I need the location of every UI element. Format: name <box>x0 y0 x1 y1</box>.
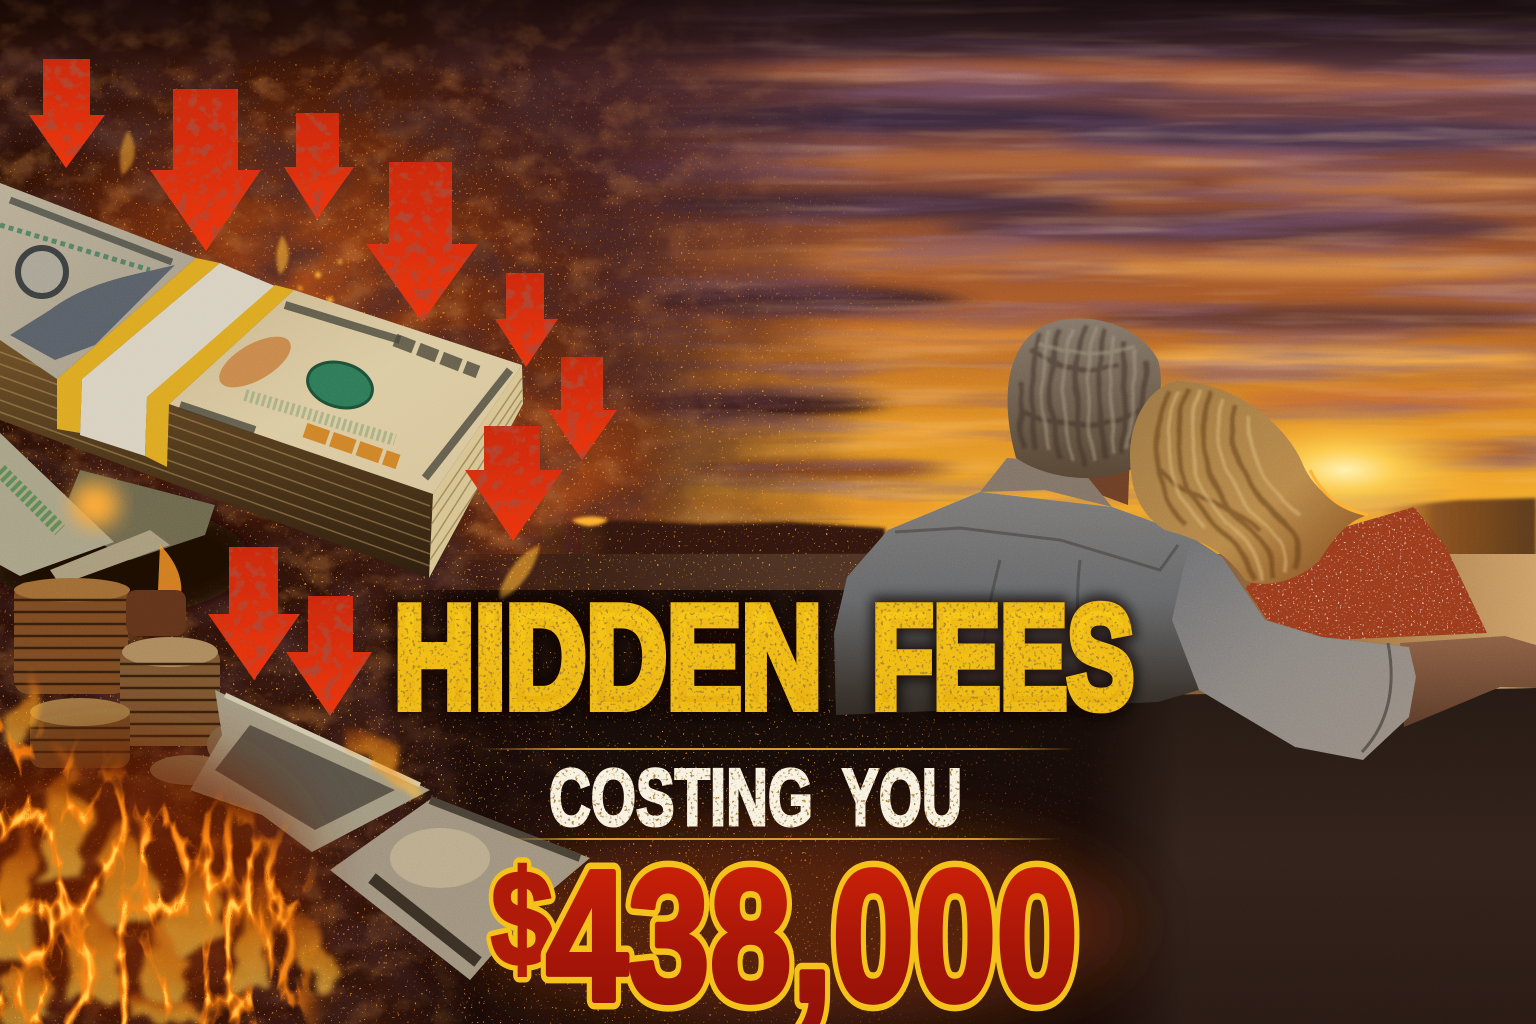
loose burning bills <box>0 433 250 615</box>
man shirt <box>834 492 1416 760</box>
subtitle: COSTING YOU: COSTING <box>549 753 813 843</box>
orange 100 numerals <box>305 430 398 462</box>
arrow 7 <box>465 426 563 541</box>
arrow 8 <box>208 547 300 680</box>
woman dress <box>1245 507 1487 640</box>
title: HIDDEN FEES <box>394 576 1134 738</box>
title letters: FEES <box>872 576 1134 738</box>
dollar sign: $ <box>491 843 553 994</box>
divider line upper <box>480 748 1075 750</box>
bill face right <box>169 290 522 494</box>
title shadow: FEES <box>872 576 1134 738</box>
arrow 9 <box>286 596 372 716</box>
downward red arrows <box>29 59 617 716</box>
sleeve cuff <box>1362 643 1391 752</box>
sun glow <box>1175 400 1515 540</box>
serial number <box>0 225 150 270</box>
water <box>440 554 1536 714</box>
forearm <box>1400 636 1536 727</box>
yellow flame filaments <box>0 780 290 1024</box>
amount: $438,000 <box>491 833 1078 1024</box>
stone wall <box>560 688 1536 1024</box>
arrow 6 <box>548 357 617 460</box>
border print <box>180 305 510 478</box>
portrait glow <box>211 326 299 398</box>
arrow 1 <box>29 59 105 168</box>
woman hair <box>1130 381 1368 584</box>
cash stack with band <box>0 183 523 578</box>
border print left <box>10 200 172 262</box>
100 numeral top <box>395 340 478 372</box>
flames <box>0 660 425 1024</box>
scattered bills on the ground <box>190 690 590 980</box>
lower text shade <box>380 590 1180 1024</box>
sleeve <box>1172 540 1416 760</box>
band yellow right <box>145 285 294 467</box>
couple viewed from behind <box>834 318 1536 760</box>
arrow 4 <box>366 162 478 322</box>
orange flame filaments <box>0 680 310 1024</box>
man head <box>1008 318 1161 478</box>
page edge lines <box>430 378 522 560</box>
divider line lower <box>500 838 1060 840</box>
ember glows <box>120 130 608 600</box>
band white <box>80 263 275 456</box>
subtitle: COSTING YOU: YOU <box>842 753 962 843</box>
title letters: HIDDEN <box>394 576 822 738</box>
portrait shading <box>10 265 175 360</box>
title shadow: HIDDEN <box>394 576 822 738</box>
shirt seam <box>895 528 1178 680</box>
arrow 2 <box>150 89 261 251</box>
background: sunset sky <box>0 0 1536 560</box>
arrow 5 <box>495 273 558 367</box>
flame tongues <box>0 660 425 1024</box>
dollar sign: $ <box>491 843 553 994</box>
page lines <box>0 352 430 566</box>
fine green print <box>245 395 395 440</box>
coin stacks <box>14 578 263 785</box>
bill face left <box>0 183 196 379</box>
horizon tree line <box>520 498 1536 562</box>
man neck <box>1040 440 1130 505</box>
arrow 3 <box>284 113 354 219</box>
stack side pages <box>0 340 523 578</box>
bill seal left <box>18 248 66 296</box>
green seal <box>302 355 378 415</box>
shirt collar <box>980 458 1112 507</box>
band yellow left <box>57 258 220 433</box>
flying embers <box>0 60 1150 1024</box>
